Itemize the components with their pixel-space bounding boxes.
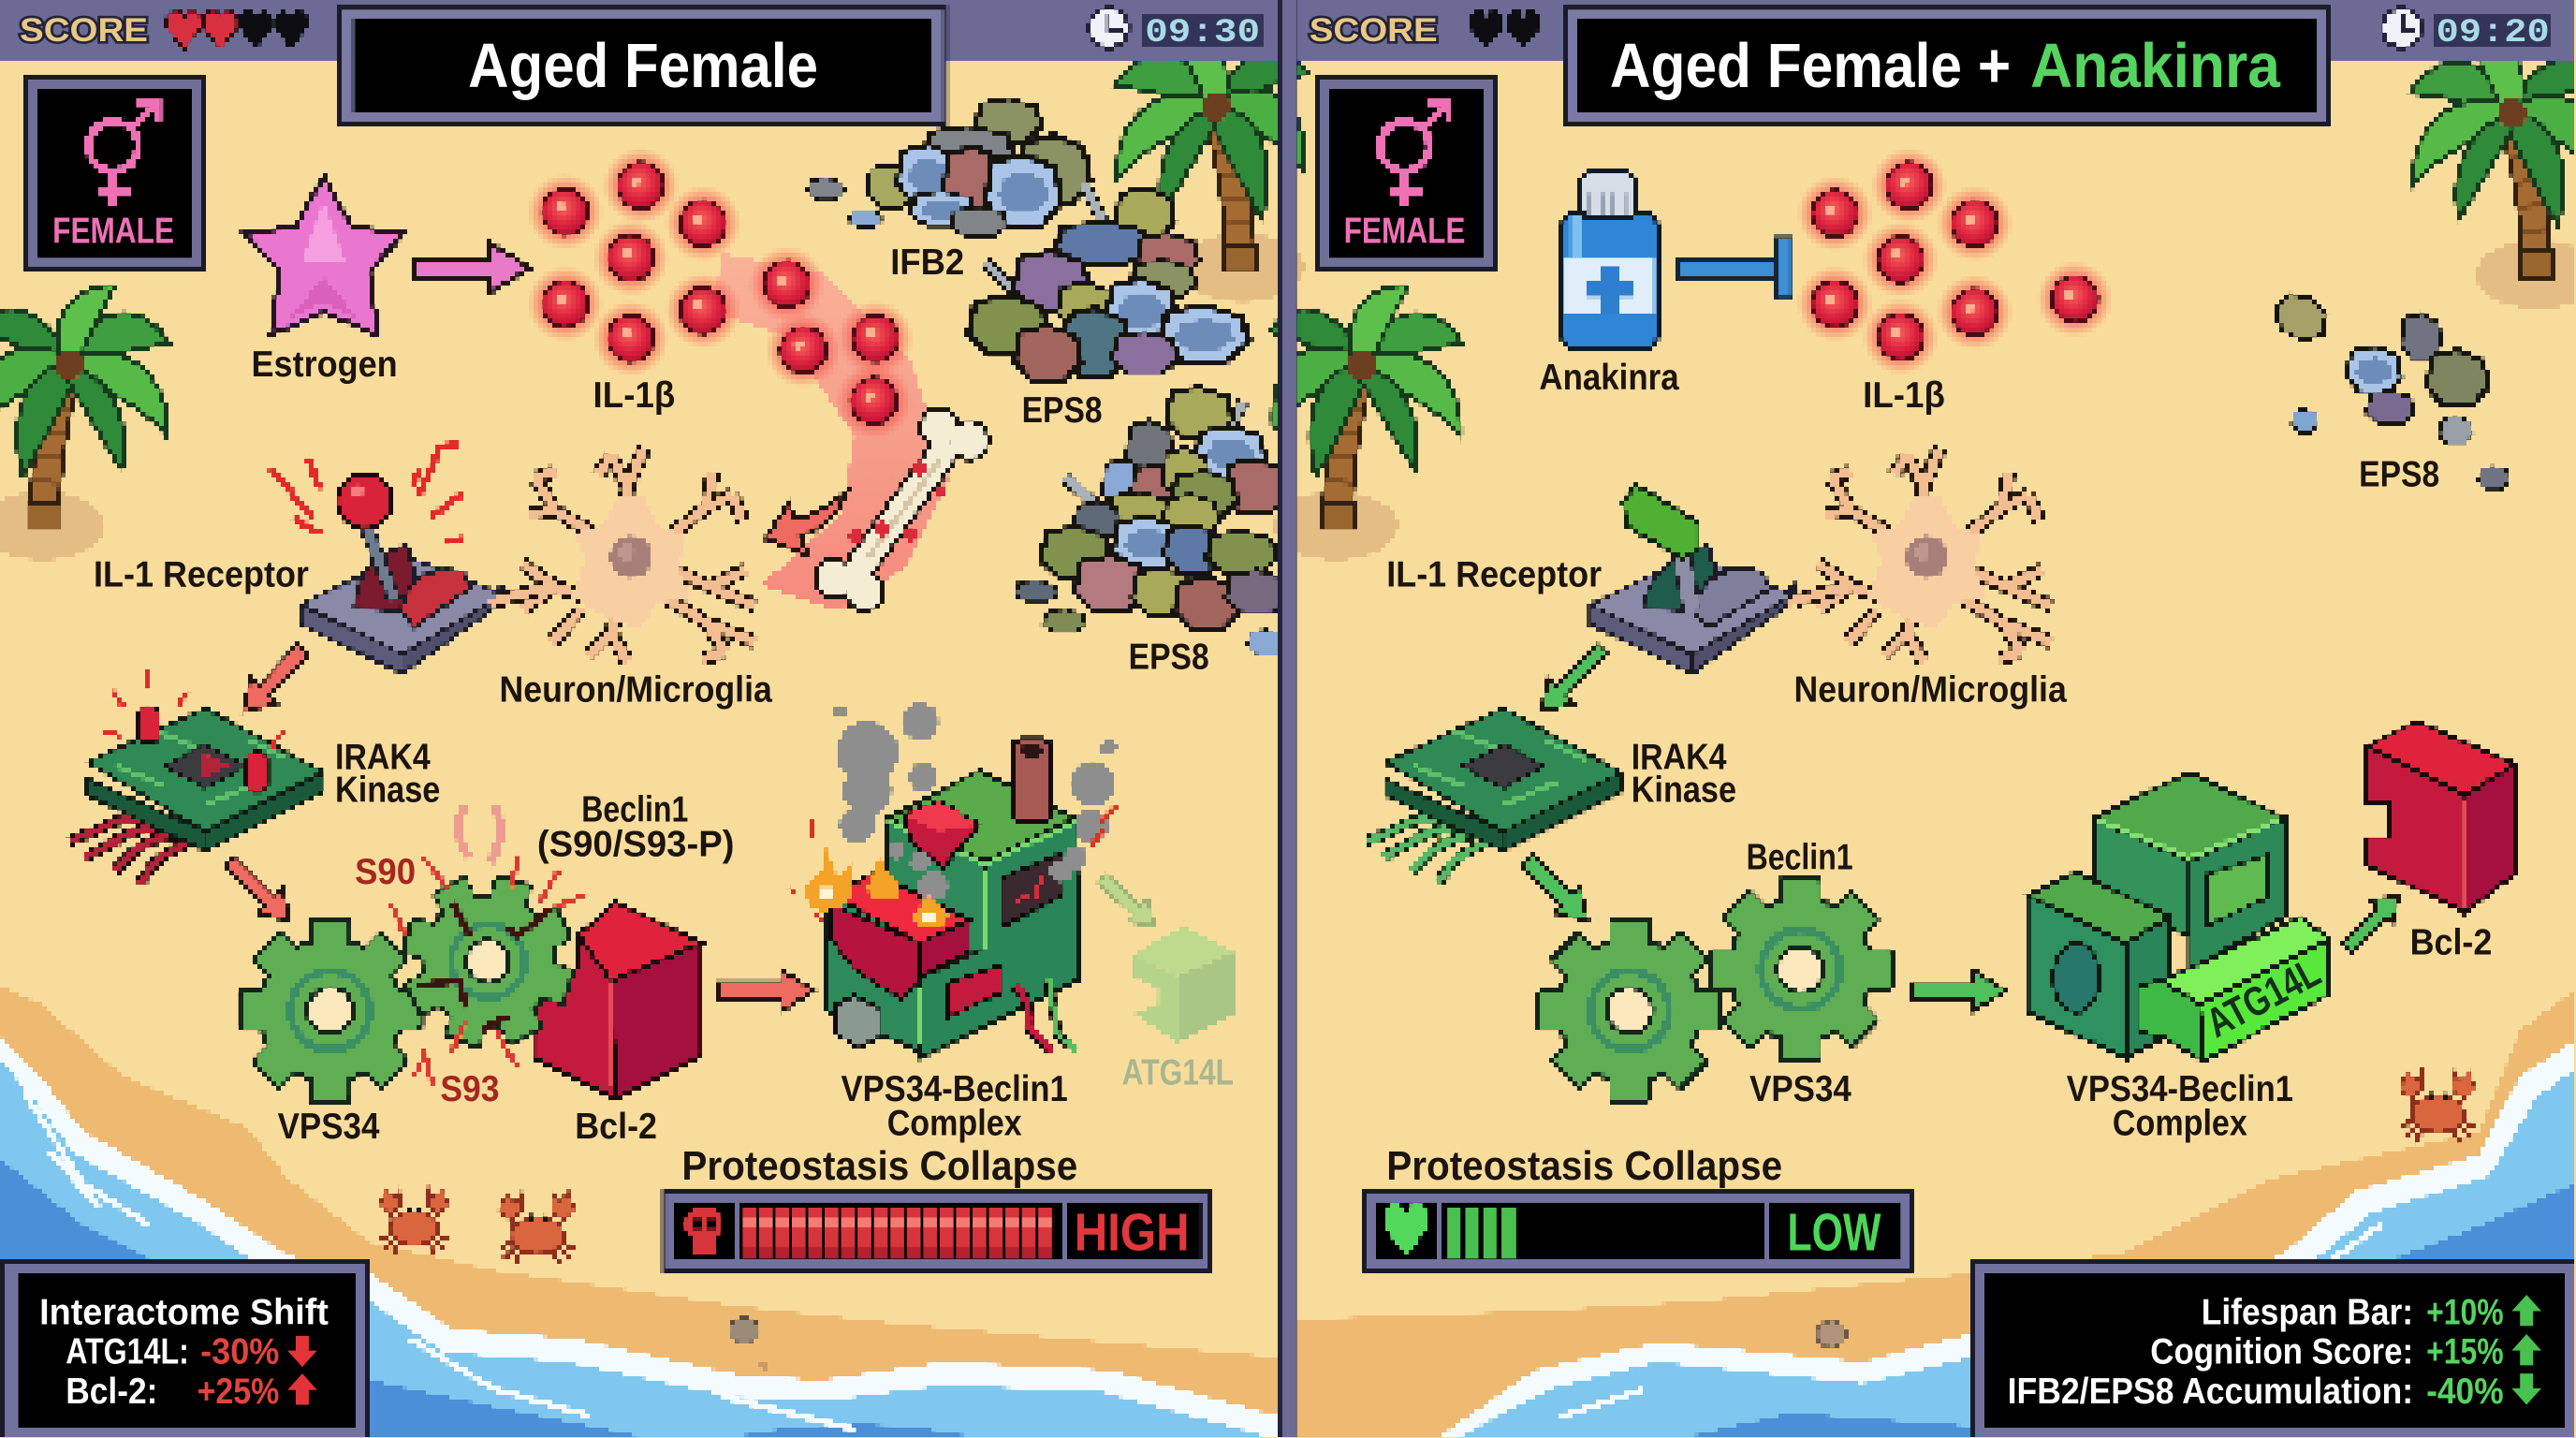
labels left panel: IL-1β bbox=[593, 375, 675, 416]
title: Aged Female + Anakinra: Aged Female + bbox=[1610, 32, 2011, 101]
labels right panel: Complex bbox=[2113, 1104, 2247, 1144]
crabs left bbox=[379, 1189, 575, 1265]
broken VPS34-Beclin1 complex bbox=[827, 740, 1079, 1058]
chip IRAK4 right bbox=[1367, 708, 1621, 884]
labels right panel: Neuron/Microglia bbox=[1793, 669, 2067, 710]
pebble left bbox=[729, 1318, 768, 1371]
title frame right bbox=[1562, 7, 2331, 126]
labels right panel: Anakinra bbox=[1539, 358, 1679, 398]
interactome text: Interactome Shift bbox=[39, 1293, 329, 1333]
arrow up green cognition bbox=[2511, 1334, 2541, 1365]
title: Aged Female: Aged Female bbox=[468, 32, 818, 101]
proteostasis bar right frame bbox=[1364, 1190, 1914, 1271]
ocean: right panel shore bbox=[1297, 990, 2576, 1438]
fire bbox=[788, 805, 1117, 929]
interactome text: +25% bbox=[198, 1372, 279, 1412]
interactome text: Bcl-2: bbox=[66, 1372, 157, 1412]
icon: clock right bbox=[2382, 8, 2422, 48]
chip IRAK4 left bbox=[69, 670, 324, 884]
Bcl-2 block left bbox=[534, 902, 701, 1099]
phospho sparks bbox=[391, 855, 583, 1084]
labels right panel: VPS34 bbox=[1749, 1069, 1852, 1109]
labels left panel: Beclin1 bbox=[581, 789, 688, 829]
arrow: estrogen to IL-1β bbox=[413, 243, 531, 292]
heat wisps bbox=[459, 805, 500, 862]
outcomes text: Lifespan Bar: bbox=[2202, 1293, 2413, 1333]
panel divider bbox=[1277, 0, 1299, 1438]
hearts left: two red, two empty bbox=[167, 10, 308, 50]
IFB2 rock pile bbox=[807, 98, 1090, 237]
labels left panel: S90 bbox=[355, 852, 416, 892]
title: Aged Female + Anakinra bbox=[1610, 32, 2281, 101]
badge right bbox=[1314, 76, 1497, 272]
green level segments bbox=[1447, 1208, 1516, 1258]
time box right bbox=[2433, 13, 2552, 46]
labels left panel: (S90/S93-P) bbox=[537, 824, 734, 864]
labels left panel: EPS8 bbox=[1129, 637, 1209, 677]
outcomes frame bbox=[1971, 1258, 2576, 1438]
IL-1β cluster left bbox=[527, 148, 914, 439]
labels left panel: Kinase bbox=[335, 770, 440, 810]
arrow: faded to ATG14L bbox=[1092, 868, 1165, 938]
labels left panel: VPS34 bbox=[278, 1107, 380, 1147]
proteostasis bar left frame bbox=[662, 1190, 1212, 1271]
outcomes text: IFB2/EPS8 Accumulation: bbox=[2008, 1372, 2413, 1412]
icon: palm tree top right right panel bbox=[2410, 35, 2576, 309]
icon: clock left bbox=[1090, 8, 1129, 48]
labels left panel: S93 bbox=[440, 1069, 500, 1109]
HIGH label: HIGH bbox=[1075, 1203, 1190, 1262]
title: Aged Female + Anakinra: Anakinra bbox=[2030, 32, 2281, 101]
ocean: left panel shore bbox=[0, 986, 1278, 1438]
LOW label: LOW bbox=[1787, 1203, 1881, 1262]
arrow: gears to complex right bbox=[1910, 970, 2006, 1011]
labels right panel: IL-1β bbox=[1863, 375, 1945, 416]
badge text left: FEMALE bbox=[52, 212, 174, 252]
labels left panel: Bcl-2 bbox=[575, 1107, 657, 1147]
labels left panel: VPS34-Beclin1 bbox=[842, 1069, 1068, 1109]
HUD right text: 09:20 bbox=[2437, 14, 2550, 51]
HUD right text: SCORE bbox=[1310, 12, 1438, 49]
arrow: IRAK4 to gears left bbox=[217, 848, 303, 934]
arrow: IRAK4 to gears right bbox=[1515, 848, 1601, 934]
labels left panel: IL-1 Receptor bbox=[94, 555, 309, 595]
EPS8 rock pile one bbox=[968, 184, 1250, 381]
arrow down red bbox=[287, 1336, 317, 1367]
arrow: switch to IRAK4 left bbox=[229, 636, 317, 725]
labels right panel: IRAK4 bbox=[1632, 737, 1727, 777]
interactome text: ATG14L: bbox=[66, 1332, 189, 1372]
icon: estrogen star bbox=[244, 176, 404, 335]
interactome text: -30% bbox=[200, 1332, 279, 1372]
title frame left bbox=[339, 7, 948, 126]
smoke bbox=[833, 702, 1117, 844]
labels right panel: EPS8 bbox=[2359, 454, 2439, 494]
arrow: complex to Bcl-2 bbox=[2334, 883, 2411, 960]
alarm sparks around switch bbox=[271, 444, 463, 542]
proteostasis label left: Proteostasis Collapse bbox=[681, 1143, 1077, 1189]
inhibition bar bbox=[1677, 238, 1793, 299]
Bcl-2 block right bbox=[2367, 721, 2515, 912]
switch left bbox=[300, 472, 505, 674]
EPS8 rock pile two bbox=[1016, 387, 1288, 655]
arrow: bone to neuron bbox=[766, 488, 849, 555]
crab right bbox=[2400, 1071, 2476, 1143]
labels left panel bbox=[94, 242, 1234, 1147]
badge left bbox=[23, 76, 205, 272]
proteostasis label right: Proteostasis Collapse bbox=[1386, 1143, 1782, 1189]
outcomes text bbox=[2008, 1293, 2504, 1412]
labels right panel: Kinase bbox=[1632, 770, 1736, 810]
outcomes text: Cognition Score: bbox=[2150, 1332, 2413, 1372]
arrow down green accumulation bbox=[2511, 1373, 2541, 1405]
HUD right text bbox=[1310, 12, 2550, 51]
switch right bbox=[1590, 485, 1793, 674]
HUD left text: 09:30 bbox=[1145, 14, 1260, 51]
hearts right: two empty bbox=[1470, 10, 1540, 50]
labels left panel: IRAK4 bbox=[335, 737, 431, 777]
smoke foreground bbox=[888, 843, 1088, 901]
labels left panel: EPS8 bbox=[1022, 390, 1103, 431]
connector switch to neuron left bbox=[490, 587, 549, 603]
icon: palm tree top right left panel bbox=[1114, 28, 1308, 302]
pebble right bbox=[1817, 1321, 1847, 1347]
icon: palm tree left right panel bbox=[1270, 286, 1464, 560]
labels right panel: VPS34-Beclin1 bbox=[2067, 1069, 2293, 1109]
HUD left text bbox=[20, 12, 1260, 51]
labels right panel: Beclin1 bbox=[1747, 837, 1853, 877]
inflammation swoosh bbox=[716, 253, 949, 611]
arrow: switch to IRAK4 right bbox=[1528, 636, 1616, 725]
time box left bbox=[1142, 13, 1264, 46]
badge text right: FEMALE bbox=[1344, 212, 1465, 252]
labels left panel: Complex bbox=[887, 1104, 1022, 1144]
ghost ATG14L block bbox=[1132, 927, 1236, 1043]
arrow up red bbox=[287, 1373, 317, 1405]
labels right panel: IL-1 Receptor bbox=[1386, 555, 1602, 595]
labels left panel: Neuron/Microglia bbox=[500, 669, 772, 710]
gear Beclin1 right bbox=[1706, 875, 1895, 1063]
interactome text bbox=[39, 1293, 329, 1412]
labels left panel: Estrogen bbox=[252, 345, 398, 385]
interactome frame bbox=[2, 1258, 370, 1438]
gear VPS34 right bbox=[1536, 917, 1723, 1104]
neuron right bbox=[1819, 448, 2052, 662]
red level segments bbox=[742, 1208, 1055, 1258]
neuron left bbox=[522, 448, 755, 662]
HUD bar left bbox=[0, 0, 1278, 59]
gear VPS34 left bbox=[237, 917, 424, 1104]
icon: palm tree left panel bbox=[0, 286, 171, 560]
arrow: Bcl-2 to complex bbox=[718, 970, 814, 1011]
anakinra bottle bbox=[1562, 172, 1658, 348]
labels right panel: Bcl-2 bbox=[2410, 923, 2492, 963]
icon: bone bbox=[813, 405, 990, 613]
HUD bar right bbox=[1297, 0, 2576, 59]
icon: green heart bbox=[1383, 1205, 1428, 1255]
outcomes text: -40% bbox=[2426, 1372, 2504, 1412]
ATG14L block label: ATG14L bbox=[2199, 949, 2328, 1047]
outcomes text: +10% bbox=[2426, 1293, 2504, 1333]
labels left panel: IFB2 bbox=[890, 242, 964, 283]
EPS8 reduced rocks bbox=[2269, 287, 2510, 490]
HUD left text: SCORE bbox=[20, 12, 148, 49]
connector switch to neuron right bbox=[1787, 587, 1847, 603]
intact VPS34-Beclin1-ATG14L complex bbox=[2027, 772, 2330, 1062]
gear Beclin1 cracked bbox=[378, 851, 597, 1071]
arrow up green lifespan bbox=[2511, 1295, 2541, 1326]
IL-1β cluster right bbox=[1797, 148, 2113, 374]
outcomes text: +15% bbox=[2426, 1332, 2504, 1372]
icon: skull bbox=[685, 1206, 721, 1254]
labels left panel: ATG14L bbox=[1122, 1052, 1234, 1093]
labels right panel bbox=[1386, 358, 2492, 1144]
